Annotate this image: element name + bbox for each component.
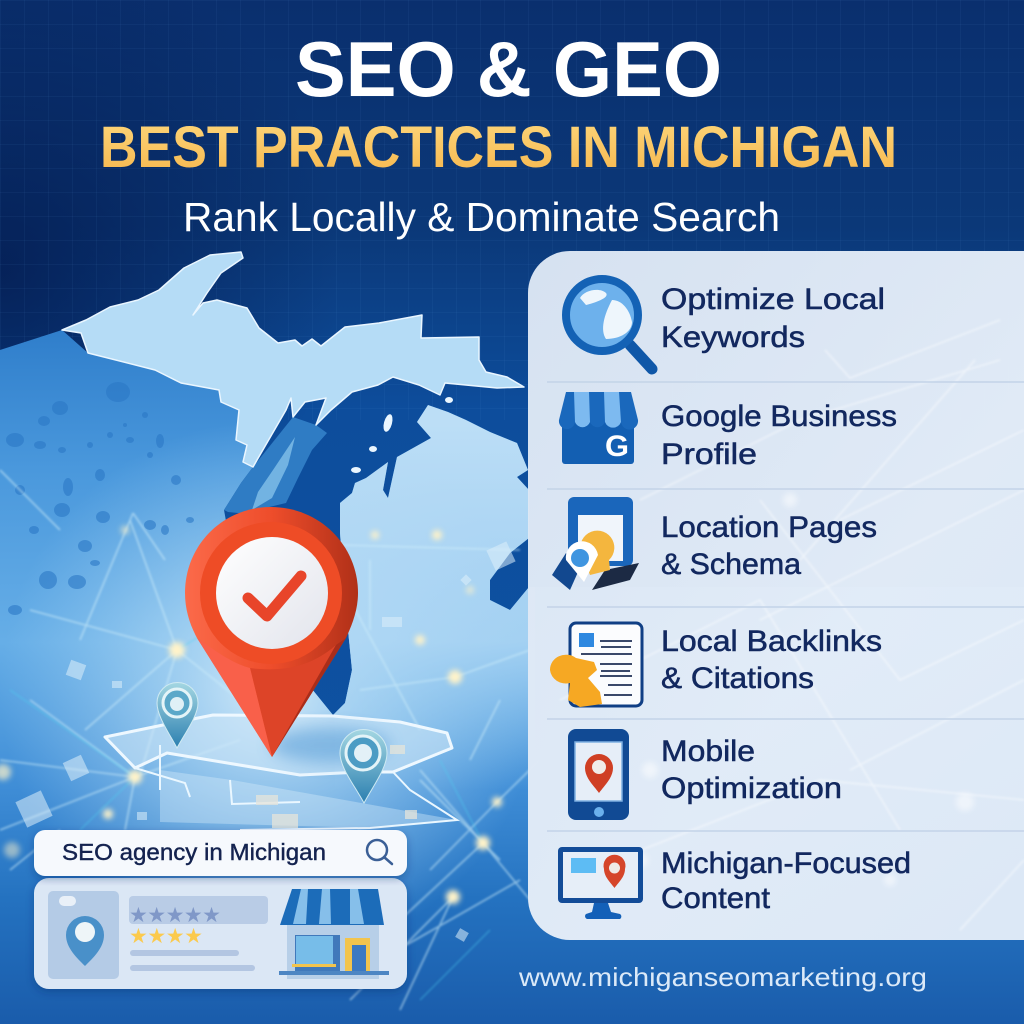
website url: www.michiganseomarketing.org — [518, 962, 927, 992]
storefront icon — [279, 889, 389, 979]
Lake islands — [351, 397, 453, 473]
network lines and glowing nodes — [0, 470, 540, 1010]
subtitle gold: BEST PRACTICES IN MICHIGAN — [100, 115, 897, 180]
icon: citation document — [550, 623, 642, 707]
map thumbnail — [48, 891, 119, 979]
map plates — [105, 715, 457, 830]
text: local backlinks and citations: & Citations — [661, 662, 814, 695]
land blotches — [6, 382, 194, 615]
text: optimize local keywords: Keywords — [661, 321, 805, 354]
search bar: SEO agency in Michigan — [62, 839, 326, 865]
text: mobile optimization: Optimization — [661, 772, 842, 805]
text: google business profile — [661, 400, 897, 471]
text: mobile optimization: Mobile — [661, 735, 755, 768]
results card — [34, 878, 407, 989]
text: optimize local keywords — [661, 283, 885, 354]
main red map pin — [185, 507, 358, 757]
text: michigan-focused content — [661, 847, 911, 915]
text: michigan-focused content: Michigan-Focused — [661, 847, 911, 880]
check mark — [248, 576, 301, 616]
small teal pin right — [340, 730, 387, 803]
icon: google business storefront: G — [605, 430, 629, 463]
search bar — [34, 830, 407, 876]
white check disc — [216, 537, 328, 649]
rating stars: ★★★★ — [129, 925, 203, 948]
text: location pages and schema: & Schema — [661, 548, 801, 581]
icon: google business storefront — [559, 392, 638, 464]
text: optimize local keywords: Optimize Local — [661, 283, 885, 316]
small teal pin left — [157, 682, 198, 748]
icon: magnifier globe — [566, 279, 652, 369]
text: location pages and schema: Location Pages — [661, 511, 877, 544]
Upper Peninsula — [62, 252, 524, 467]
search icon — [367, 840, 392, 864]
text: local backlinks and citations — [661, 625, 882, 695]
icon: mobile phone — [568, 729, 629, 820]
text: google business profile: Profile — [661, 438, 757, 471]
tagline: Rank Locally & Dominate Search — [183, 194, 780, 240]
panel: best practices — [528, 251, 1024, 940]
icon: location pages — [552, 497, 639, 590]
rating stars — [129, 896, 268, 971]
land and lake base — [0, 320, 1024, 1024]
Green Bay band — [224, 417, 327, 514]
dividers — [547, 382, 1024, 831]
text: location pages and schema — [661, 511, 877, 581]
text: michigan-focused content: Content — [661, 882, 771, 915]
rating stars: ★★★★★ — [129, 904, 221, 927]
text: google business profile: Google Business — [661, 400, 897, 433]
title: SEO & GEO — [295, 25, 722, 113]
text: mobile optimization — [661, 735, 842, 805]
text: local backlinks and citations: Local Backlinks — [661, 625, 882, 658]
icon: desktop monitor — [558, 847, 643, 919]
